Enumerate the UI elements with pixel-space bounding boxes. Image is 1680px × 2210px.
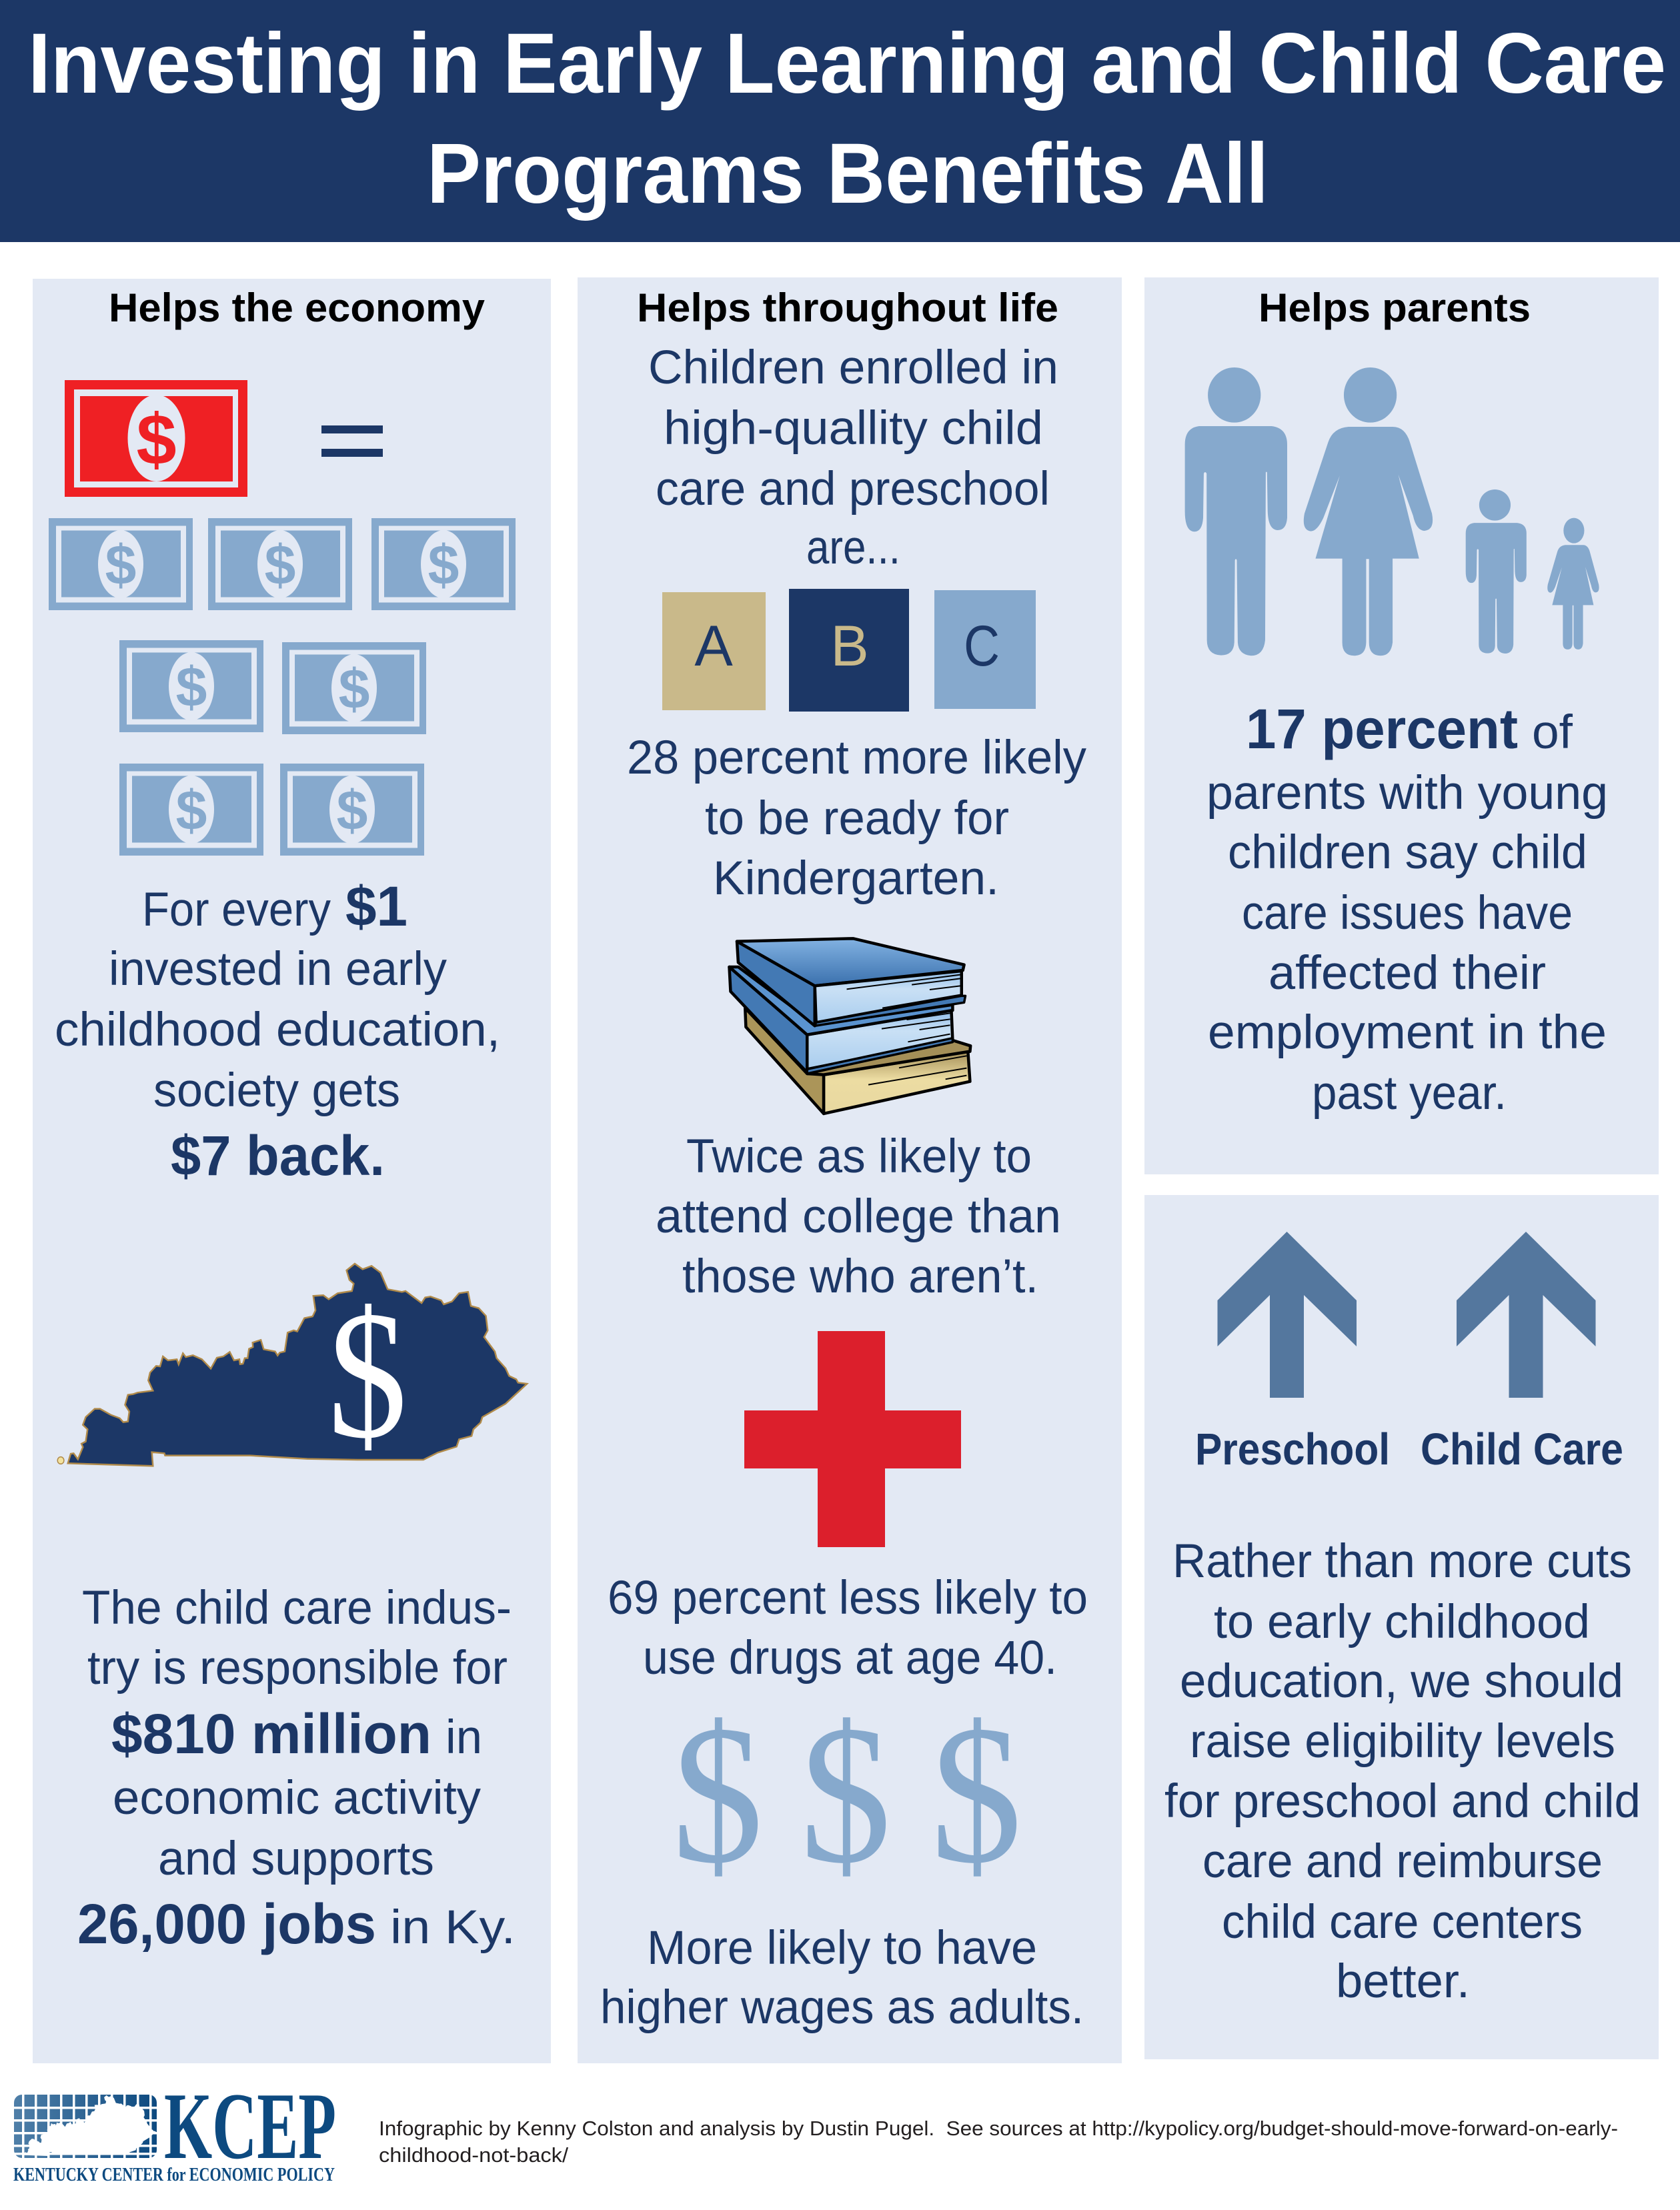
icon: Kentucky map with dollar sign: $ xyxy=(328,1274,407,1476)
logo: KCEP: KENTUCKY CENTER for ECONOMIC POLICY xyxy=(13,2164,335,2185)
text block: child care industry impact: economic activity xyxy=(113,1772,482,1825)
icon: seven blue dollar bills: $ xyxy=(105,533,136,596)
text block: employment statistic: care issues have xyxy=(1242,887,1573,940)
icon: stack of books xyxy=(730,938,970,1114)
text block: intro: high-quallity child xyxy=(664,402,1043,455)
text block: child care industry impact: The child care indus- xyxy=(82,1582,512,1634)
panel: helps the economy xyxy=(33,279,551,2063)
icon: A B C blocks: C xyxy=(964,614,1000,678)
icon: three dollar signs xyxy=(672,1685,1022,1905)
text block: recommendation: to early childhood xyxy=(1214,1596,1590,1648)
icon: seven blue dollar bills: $ xyxy=(339,658,369,720)
text block: higher wages: More likely to have xyxy=(647,1922,1037,1975)
text block: intro xyxy=(648,341,1058,574)
text block: child care industry impact: and supports xyxy=(158,1833,434,1885)
text block: employment statistic: employment in the xyxy=(1208,1006,1607,1059)
logo: KCEP xyxy=(13,2073,336,2185)
icon: seven blue dollar bills xyxy=(49,518,516,856)
footer credit: Infographic by Kenny Colston and analysis by Dustin Pugel. See sources at http://kypolicy.org/budget-should-move-forward-on-early- xyxy=(379,2117,1618,2140)
title banner xyxy=(0,0,1680,242)
icon: seven blue dollar bills: $ xyxy=(428,533,459,596)
icon: A B C blocks: B xyxy=(830,614,869,678)
text block: recommendation: care and reimburse xyxy=(1202,1835,1603,1888)
text block: college attendance: attend college than xyxy=(656,1190,1061,1243)
text block: drug use: 69 percent less likely to xyxy=(608,1572,1088,1624)
icon: three dollar signs: $ xyxy=(672,1685,763,1905)
icon: red one dollar bill: $ xyxy=(136,399,177,479)
label: preschool: Preschool xyxy=(1195,1424,1390,1474)
text block: employment statistic: children say child xyxy=(1228,826,1587,879)
text block: higher wages: higher wages as adults. xyxy=(600,1981,1084,2034)
icon: A B C blocks xyxy=(662,589,1036,712)
footer credit: childhood-not-back/ xyxy=(379,2143,568,2167)
icon: seven blue dollar bills: $ xyxy=(176,779,207,842)
text block: kindergarten readiness: Kindergarten. xyxy=(713,852,999,905)
text block: employment statistic: affected their xyxy=(1269,947,1546,1000)
text block: drug use xyxy=(608,1572,1088,1685)
panel: helps throughout life xyxy=(578,277,1122,2063)
text block: drug use: use drugs at age 40. xyxy=(643,1632,1057,1685)
icon: three dollar signs: $ xyxy=(800,1685,891,1905)
text block: kindergarten readiness xyxy=(627,732,1086,905)
icon: three dollar signs: $ xyxy=(931,1685,1022,1905)
text block: return on investment: invested in early xyxy=(109,943,447,996)
text block: recommendation: child care centers xyxy=(1222,1896,1583,1949)
text block: college attendance: Twice as likely to xyxy=(686,1130,1032,1183)
icon: family of four xyxy=(1185,367,1599,656)
icon: red one dollar bill xyxy=(65,380,247,497)
logo: KCEP: KCEP xyxy=(164,2073,336,2179)
panel: helps parents xyxy=(1144,277,1659,1174)
icon: Kentucky map with dollar sign xyxy=(57,1264,527,1476)
text block: recommendation: raise eligibility levels xyxy=(1190,1715,1615,1768)
title banner: Programs Benefits All xyxy=(427,126,1269,221)
text block: child care industry impact: in Ky. xyxy=(390,1901,516,1954)
text block: higher wages xyxy=(600,1922,1084,2034)
text block: child care industry impact: 26,000 jobs xyxy=(77,1893,376,1955)
heading: helps throughout life: Helps throughout life xyxy=(637,285,1058,330)
text block: child care industry impact: in xyxy=(446,1711,482,1764)
heading: helps the economy: Helps the economy xyxy=(109,285,486,330)
text block: return on investment: $1 xyxy=(345,875,407,938)
icon: seven blue dollar bills: $ xyxy=(176,656,207,718)
text block: intro: care and preschool xyxy=(656,463,1050,515)
text block: college attendance xyxy=(656,1130,1061,1303)
text block: return on investment: childhood education, xyxy=(55,1004,500,1056)
footer credit xyxy=(379,2117,1618,2167)
icon: preschool up arrow xyxy=(1218,1232,1357,1398)
text block: employment statistic: of xyxy=(1532,706,1573,759)
text block: employment statistic: past year. xyxy=(1312,1067,1507,1120)
text block: employment statistic: parents with young xyxy=(1206,767,1608,820)
icon: seven blue dollar bills: $ xyxy=(265,533,295,596)
icon: A B C blocks: A xyxy=(694,614,733,678)
text block: kindergarten readiness: 28 percent more likely xyxy=(627,732,1086,784)
text block: return on investment: $7 back. xyxy=(171,1124,385,1187)
label: child care: Child Care xyxy=(1421,1424,1623,1474)
text block: employment statistic xyxy=(1206,698,1608,1120)
icon: seven blue dollar bills: $ xyxy=(337,779,367,842)
text block: child care industry impact: try is responsible for xyxy=(87,1642,508,1695)
panel: raise eligibility xyxy=(1144,1195,1659,2059)
text block: recommendation xyxy=(1164,1535,1641,2008)
text block: intro: are... xyxy=(806,521,900,574)
text block: employment statistic: 17 percent xyxy=(1246,698,1518,760)
text block: kindergarten readiness: to be ready for xyxy=(705,792,1009,845)
text block: return on investment: For every xyxy=(142,884,331,936)
text block: child care industry impact xyxy=(77,1582,516,1955)
text block: recommendation: Rather than more cuts xyxy=(1172,1535,1632,1588)
text block: return on investment xyxy=(55,875,500,1187)
text block: recommendation: education, we should xyxy=(1180,1655,1623,1708)
text block: college attendance: those who aren’t. xyxy=(682,1250,1038,1303)
icon: equals sign xyxy=(321,425,383,457)
text block: recommendation: better. xyxy=(1336,1955,1470,2008)
text block: recommendation: for preschool and child xyxy=(1164,1775,1641,1828)
icon: child care up arrow xyxy=(1457,1232,1595,1398)
text block: return on investment: society gets xyxy=(153,1064,400,1117)
icon: red cross xyxy=(744,1331,961,1547)
heading: helps parents: Helps parents xyxy=(1258,285,1531,330)
text block: intro: Children enrolled in xyxy=(648,341,1058,394)
text block: child care industry impact: $810 million xyxy=(111,1703,432,1765)
